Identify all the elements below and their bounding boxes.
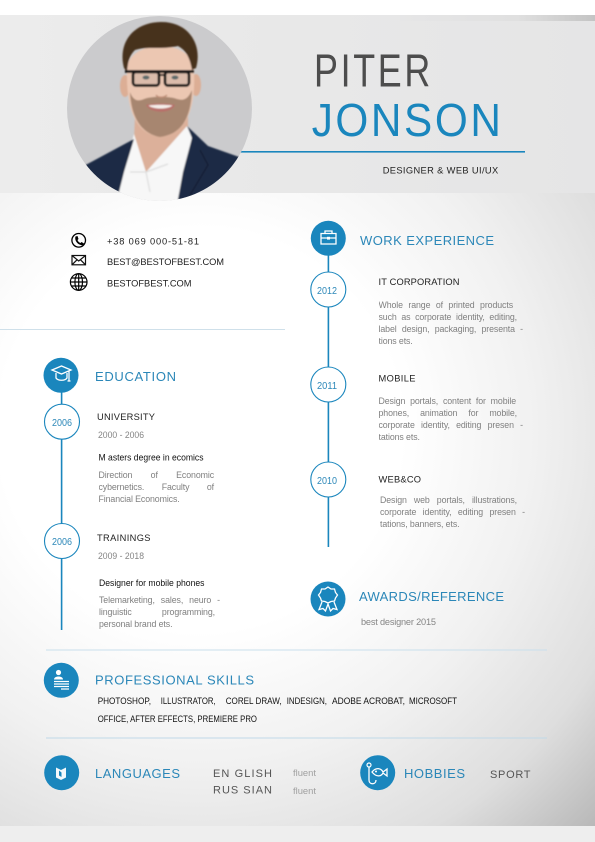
beard: [130, 90, 192, 137]
skills list: ADOBE ACROBAT,: [332, 696, 405, 706]
panel: awards: [310, 582, 504, 627]
timeline line: [61, 375, 62, 630]
heading: WORK EXPERIENCE: [360, 233, 494, 248]
entry: university: 2000 - 2006: [98, 430, 144, 440]
skills list: [98, 696, 457, 724]
website: BESTOFBEST.COM: [107, 278, 192, 288]
icon: person with lines: [44, 663, 79, 698]
entry: web&co: corporate identity, editing presen -: [380, 507, 525, 517]
entry: trainings: TRAININGS: [97, 533, 150, 543]
divider: [46, 738, 547, 739]
mouth: [146, 104, 175, 112]
entry: mobile: tations ets.: [378, 432, 420, 442]
skills list: INDESIGN,: [287, 696, 327, 706]
nose shadow: [156, 95, 167, 97]
bottom strip: [0, 826, 595, 842]
entry: mobile: Design portals, content for mobile: [378, 396, 516, 406]
award text: best designer 2015: [361, 617, 436, 627]
glasses: [133, 72, 189, 86]
entry: university: M asters degree in ecomics: [98, 452, 204, 462]
panel: education: [44, 358, 224, 630]
hair: [122, 22, 198, 72]
icon: envelope: [72, 256, 86, 265]
icon: phone: [72, 234, 85, 247]
language: english: EN GLISH: [213, 768, 272, 780]
face: [127, 46, 194, 137]
panel: hobbies: [360, 755, 531, 790]
level: fluent: [293, 786, 317, 796]
header rule: [240, 151, 525, 153]
jacket right: [177, 126, 239, 200]
heading: AWARDS/REFERENCE: [359, 589, 504, 604]
divider: [46, 650, 547, 651]
eyes: [142, 76, 150, 80]
skills list: OFFICE, AFTER EFFECTS, PREMIERE PRO: [98, 714, 257, 724]
entry: university: UNIVERSITY: [97, 412, 155, 422]
shirt: [115, 126, 192, 205]
entry: web&co: WEB&CO: [378, 475, 421, 485]
entry: mobile: MOBILE: [378, 374, 416, 384]
timeline line: [328, 238, 329, 547]
entry: web&co: Design web portals, illustrations,: [380, 495, 517, 505]
entry: IT corporation: such as corporate identity, editing,: [378, 312, 517, 322]
year badge: [311, 272, 346, 307]
entry: university: [97, 412, 218, 504]
ears: [120, 75, 130, 97]
icon: map: [44, 755, 79, 790]
entry: trainings: personal brand ets.: [99, 619, 172, 629]
entry: web&co: [378, 475, 530, 530]
header band: [0, 15, 595, 193]
icon: globe: [70, 274, 87, 290]
year badge: [44, 404, 80, 439]
entry: trainings: Designer for mobile phones: [99, 578, 205, 588]
entry: trainings: 2009 - 2018: [98, 551, 144, 561]
language: russian: RUS SIAN: [213, 784, 272, 796]
year badge: [311, 367, 346, 402]
year badge: 2011: [317, 380, 337, 392]
entry: IT corporation: [378, 277, 528, 347]
panel: work experience: [311, 221, 530, 547]
name: first: PITER: [314, 45, 433, 97]
portrait photo: [67, 16, 252, 201]
entry: mobile: corporate identity, editing presen -: [378, 420, 523, 430]
name: last: JONSON: [312, 95, 503, 146]
entry: university: Direction of Economic: [98, 470, 214, 480]
level: fluent: [293, 768, 317, 778]
contacts: [70, 234, 224, 290]
heading: LANGUAGES: [95, 766, 180, 781]
icon: award rosette: [310, 582, 346, 616]
skills list: PHOTOSHOP,: [98, 696, 151, 706]
year badge: [44, 524, 80, 558]
hobby: SPORT: [490, 769, 531, 781]
entry: trainings: Telemarketing, sales, neuro -: [99, 595, 220, 605]
divider: [0, 329, 285, 330]
job title: DESIGNER & WEB UI/UX: [383, 166, 498, 176]
entry: IT corporation: IT CORPORATION: [378, 277, 460, 287]
heading: PROFESSIONAL SKILLS: [95, 673, 254, 688]
icon: briefcase: [311, 221, 346, 256]
skills list: ILLUSTRATOR,: [161, 696, 216, 706]
year badge: [311, 462, 346, 497]
panel: professional skills: [44, 663, 457, 724]
year badge: 2010: [317, 475, 337, 487]
heading: HOBBIES: [404, 766, 465, 781]
year badge: 2012: [317, 285, 337, 297]
entry: university: Financial Economics.: [98, 494, 180, 504]
icon: fish on hook: [360, 755, 395, 790]
entry: web&co: tations, banners, ets.: [380, 519, 459, 529]
email: BEST@BESTOFBEST.COM: [107, 257, 224, 267]
entry: trainings: linguistic programming,: [99, 607, 215, 617]
entry: IT corporation: Whole range of printed products: [378, 300, 513, 310]
entry: university: cybernetics. Faculty of: [98, 482, 214, 492]
year badge: 2006: [52, 417, 72, 429]
icon: graduation cap: [44, 358, 78, 393]
entry: IT corporation: tions ets.: [378, 336, 413, 346]
entry: trainings: [97, 533, 224, 630]
jacket left: [86, 138, 135, 192]
heading: EDUCATION: [95, 369, 176, 384]
skills list: MICROSOFT: [409, 696, 457, 706]
entry: mobile: [378, 374, 528, 443]
entry: mobile: phones, animation for mobile,: [378, 408, 517, 418]
page background: [0, 193, 595, 826]
panel: languages: [44, 755, 317, 796]
skills list: COREL DRAW,: [226, 696, 282, 706]
year badge: 2006: [52, 536, 72, 548]
neck: [134, 116, 188, 172]
phone number: +38 069 000-51-81: [107, 236, 199, 246]
entry: IT corporation: label design, packaging, presenta -: [378, 324, 523, 334]
